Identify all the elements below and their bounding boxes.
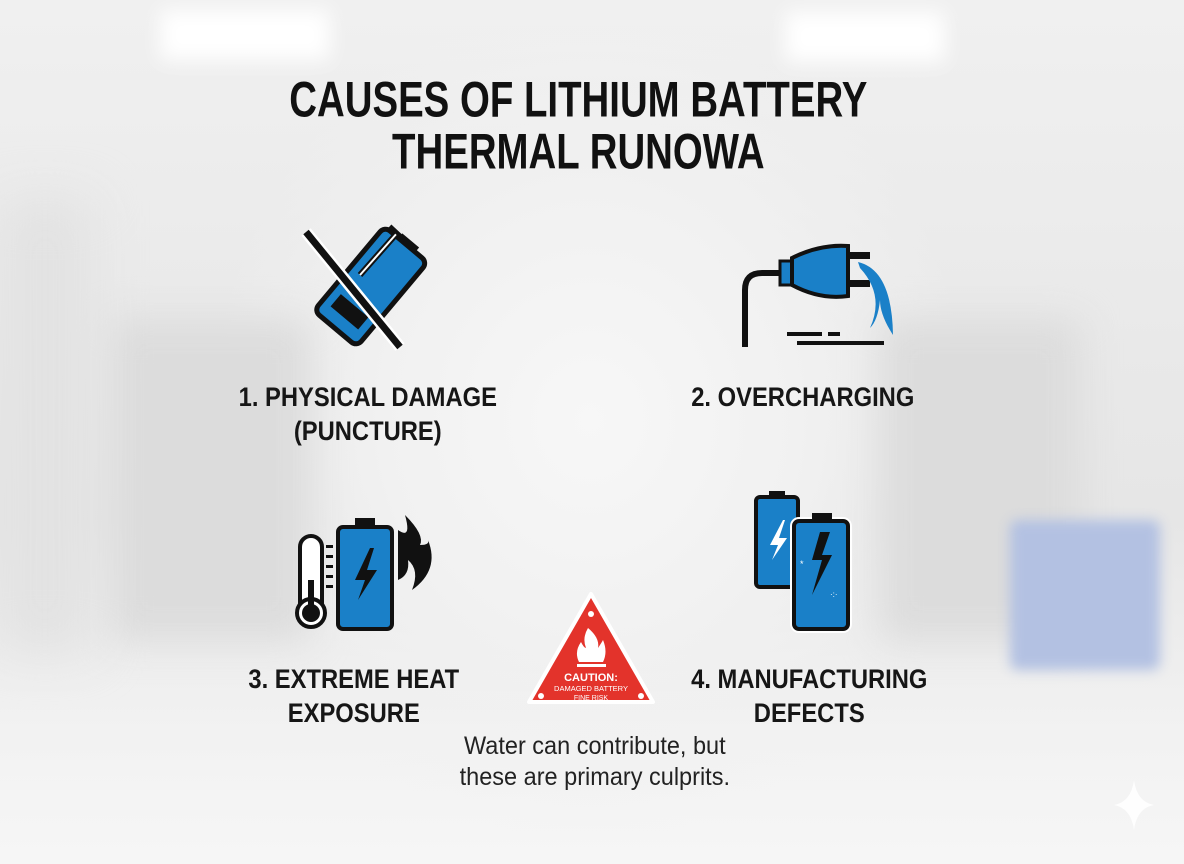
label 3 xyxy=(248,664,459,728)
title: CAUSES OF LITHIUM BATTERY xyxy=(289,73,867,128)
label 1: (PUNCTURE) xyxy=(294,416,442,446)
title: THERMAL RUNOWA xyxy=(392,125,764,180)
label 3: 3. EXTREME HEAT xyxy=(249,664,459,694)
label 3: EXPOSURE xyxy=(288,698,420,728)
caution sign xyxy=(527,592,655,704)
label 4: DEFECTS xyxy=(754,698,864,728)
label 1: 1. PHYSICAL DAMAGE xyxy=(239,382,497,412)
icon: punctured battery crossed out xyxy=(302,224,428,350)
caution sign: DAMAGED BATTERY xyxy=(554,684,628,693)
label 2: 2. OVERCHARGING xyxy=(691,382,915,412)
icon: defective batteries: * xyxy=(800,559,804,569)
icon: thermometer battery fire xyxy=(295,515,432,631)
caption: Water can contribute, but xyxy=(464,732,726,760)
label 1 xyxy=(239,382,497,446)
title xyxy=(289,73,867,180)
icon: defective batteries: ·:· xyxy=(830,590,838,599)
label 4 xyxy=(691,664,927,728)
background: blurred lab xyxy=(24,11,1166,676)
caution sign: CAUTION: xyxy=(564,672,618,684)
caption xyxy=(460,732,730,791)
caution sign: FINE RISK xyxy=(574,695,608,702)
label 4: 4. MANUFACTURING xyxy=(691,664,927,694)
icon: plug overcharging xyxy=(742,244,893,347)
icon: defective batteries xyxy=(754,491,852,633)
caption: these are primary culprits. xyxy=(460,763,730,791)
icon: sparkle xyxy=(1116,782,1152,828)
